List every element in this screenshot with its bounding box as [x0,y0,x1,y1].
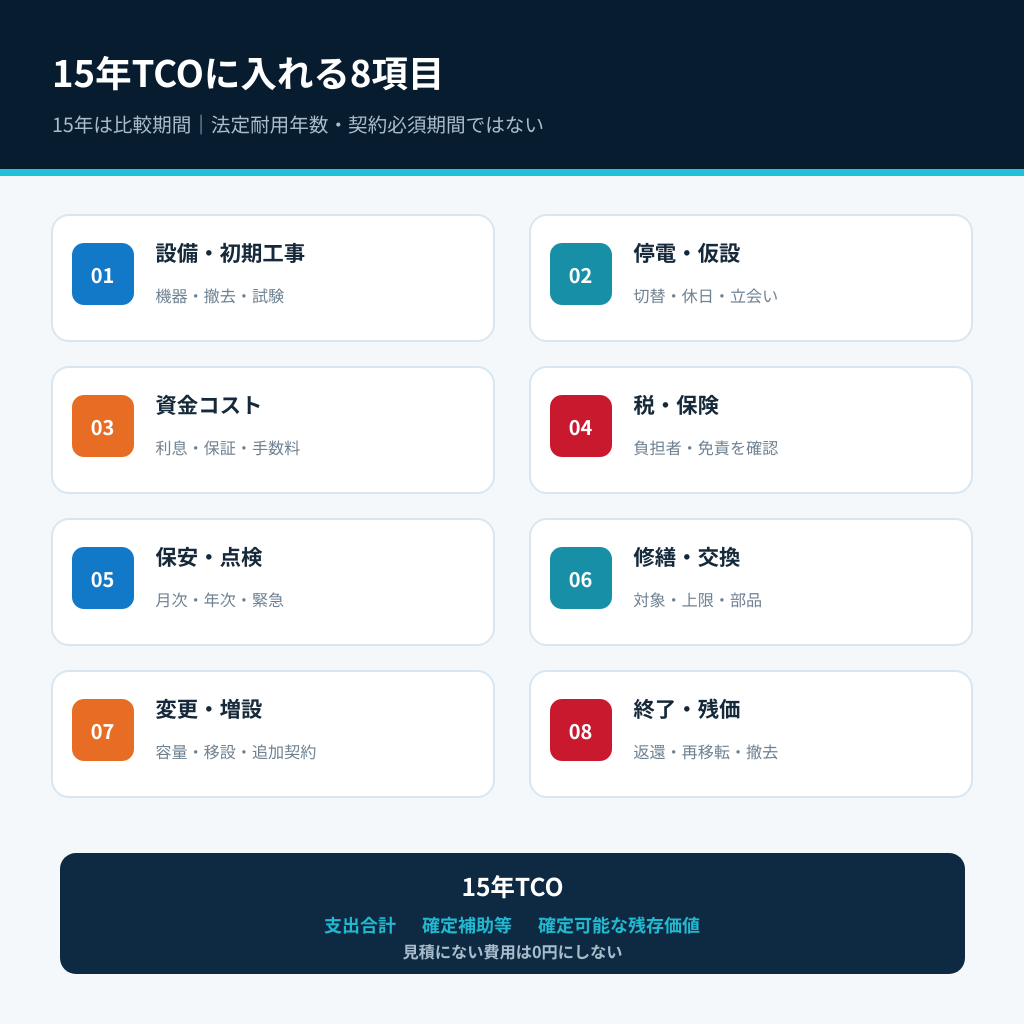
card 05 title: 保安・点検 [155,541,262,572]
badge 07: 07 [91,716,114,745]
summary panel [60,853,965,974]
card 02 title: 停電・仮設 [633,237,740,268]
badge 06: 06 [569,564,592,593]
card 07 title: 変更・増設 [155,693,262,724]
card 02 [529,214,973,342]
summary formula [324,912,700,938]
badge 02: 02 [569,260,592,289]
badge 03: 03 [91,412,114,441]
badge 04 [550,395,612,457]
card 08 title: 終了・残価 [633,693,740,724]
badge 07 [72,699,134,761]
card 01 text: 機器・撤去・試験 [155,283,284,307]
badge 08: 08 [569,716,592,745]
summary formula: 支出合計 [324,912,396,938]
subtitle: 15年は比較期間｜法定耐用年数・契約必須期間ではない [52,109,544,138]
card 06 text: 対象・上限・部品 [633,587,762,611]
badge 04: 04 [569,412,592,441]
card 01 [51,214,495,342]
card 06 [529,518,973,646]
card 08 [529,670,973,798]
badge 03 [72,395,134,457]
card 04 title: 税・保険 [633,389,719,420]
summary heading: 15年TCO [462,869,563,904]
summary formula: 確定補助等 [422,912,512,938]
card 07 [51,670,495,798]
card 05 text: 月次・年次・緊急 [155,587,284,611]
badge 05 [72,547,134,609]
badge 02 [550,243,612,305]
badge 05: 05 [91,564,114,593]
card 04 [529,366,973,494]
card 04 text: 負担者・免責を確認 [633,435,778,459]
card 03 [51,366,495,494]
badge 06 [550,547,612,609]
badge 08 [550,699,612,761]
title: 15年TCOに入れる8項目 [52,45,444,98]
card 03 title: 資金コスト [155,389,262,420]
badge 01 [72,243,134,305]
card 05 [51,518,495,646]
badge 01: 01 [91,260,114,289]
card 08 text: 返還・再移転・撤去 [633,739,778,763]
header band [0,0,1024,176]
card 07 text: 容量・移設・追加契約 [155,739,316,763]
card 03 text: 利息・保証・手数料 [155,435,300,459]
card 02 text: 切替・休日・立会い [633,283,778,307]
card 01 title: 設備・初期工事 [155,237,305,268]
summary formula: 確定可能な残存価値 [538,912,700,938]
summary note: 見積にない費用は0円にしない [402,939,622,963]
card 06 title: 修繕・交換 [633,541,740,572]
